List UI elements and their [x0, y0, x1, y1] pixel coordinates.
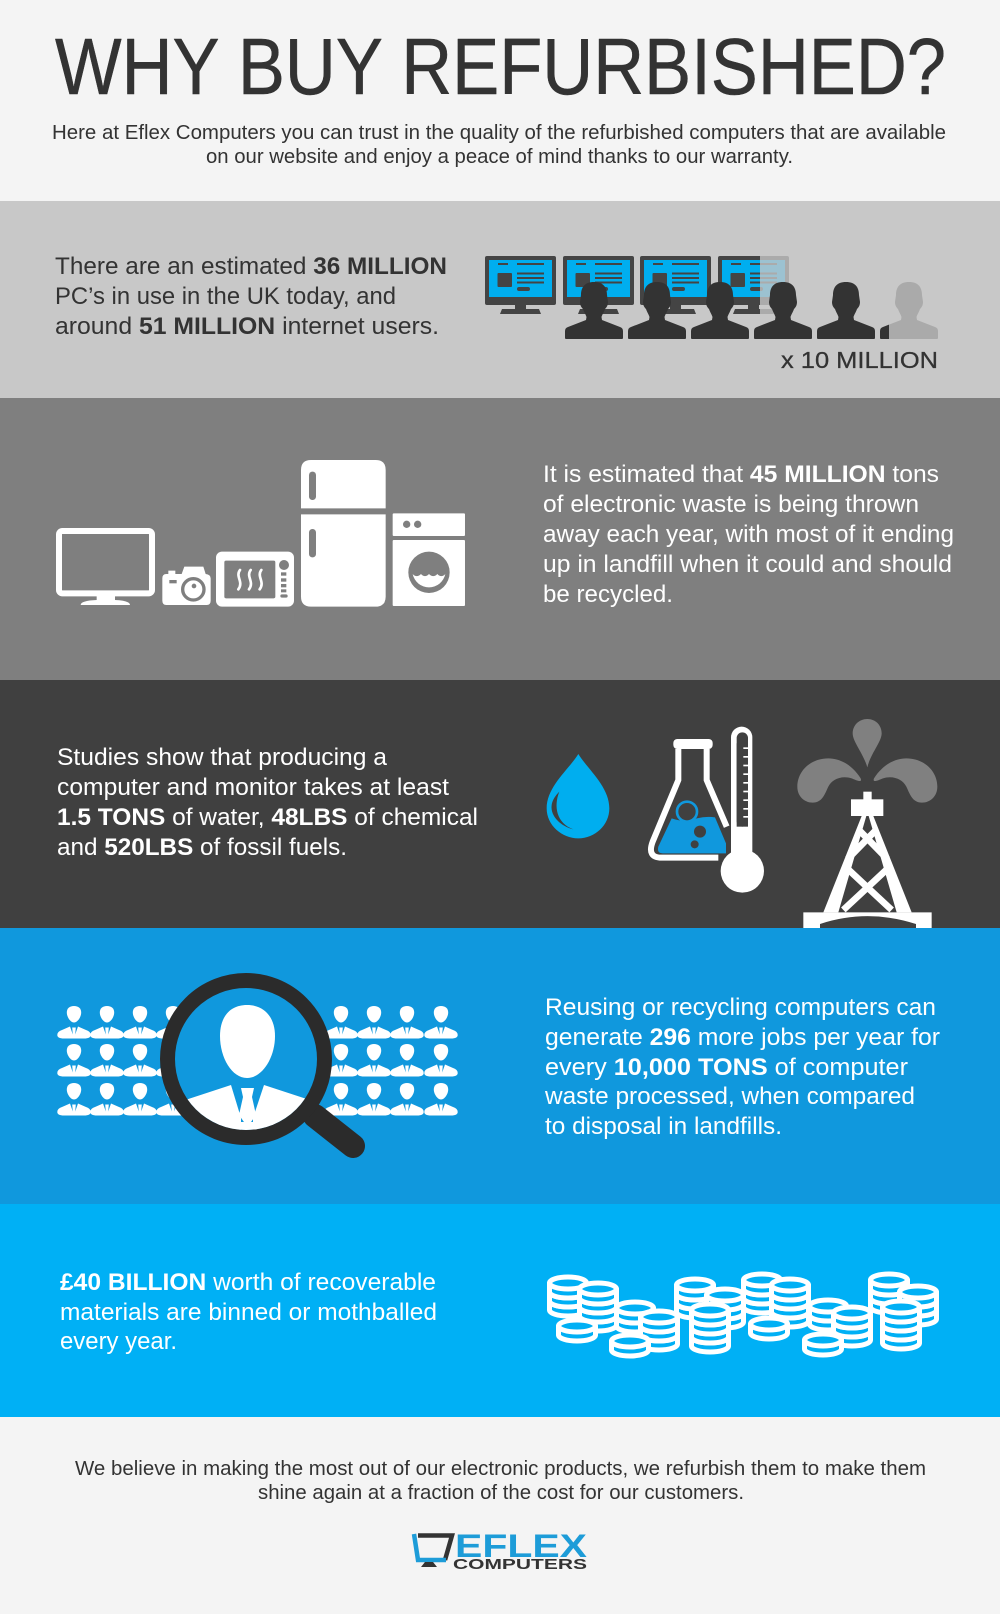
- panel text: recoverable materials: every year.: [60, 1328, 177, 1355]
- panel text: e-waste: away each year, with most of it ending: [543, 521, 954, 548]
- panel text: jobs: [544, 994, 940, 1140]
- panel text: recoverable materials: [60, 1269, 437, 1355]
- panel text: production resources: and 520LBS of fossil fuels.: [57, 834, 347, 861]
- icons: appliances: [59, 460, 465, 607]
- panel: recoverable materials: [0, 1204, 1000, 1417]
- panel text: e-waste: of electronic waste is being thrown: [543, 491, 919, 518]
- panel text: jobs: every 10,000 TONS of computer: [545, 1054, 908, 1081]
- panel text: e-waste: [543, 461, 954, 608]
- panel: electronic waste: [0, 398, 1000, 680]
- panel text: e-waste: It is estimated that 45 MILLION tons: [543, 461, 939, 488]
- panel: PCs and internet users: [0, 201, 1000, 398]
- panel text: jobs: to disposal in landfills.: [545, 1113, 782, 1140]
- closing text: shine again at a fraction of the cost for our customers.: [258, 1482, 744, 1504]
- closing text: [75, 1458, 926, 1504]
- panel: jobs: [0, 928, 1000, 1204]
- icon: microwave: [216, 552, 294, 607]
- panel text: jobs: waste processed, when compared: [544, 1083, 915, 1110]
- panel text: production resources: Studies show that producing a: [57, 744, 388, 771]
- icon: logo monitor: [414, 1534, 452, 1567]
- logo: Eflex Computers: COMPUTERS: [453, 1556, 587, 1573]
- panel text: e-waste: up in landfill when it could and should: [543, 551, 952, 578]
- panel text: PCs in use: around 51 MILLION internet users.: [55, 313, 439, 340]
- logo wordmark: EFLEX: [455, 1528, 588, 1564]
- icon: washing machine: [393, 513, 465, 606]
- icon: flask: [651, 739, 727, 858]
- panel: resources used: [0, 680, 1000, 928]
- icon: camera: [162, 567, 211, 605]
- intro text: on our website and enjoy a peace of mind thanks to our warranty.: [206, 146, 793, 168]
- panel text: production resources: 1.5 TONS of water, 48LBS of chemical: [57, 804, 478, 831]
- panel text: e-waste: be recycled.: [543, 581, 673, 608]
- panel text: jobs: Reusing or recycling computers can: [545, 994, 936, 1021]
- intro text: [52, 122, 946, 168]
- icon: fridge: [301, 460, 386, 607]
- icon: monitors row: [485, 250, 805, 320]
- panel text: recoverable materials: £40 BILLION worth of recoverable: [60, 1269, 436, 1296]
- icon: water drop: [547, 754, 609, 838]
- panel text: production resources: computer and monitor takes at least: [57, 774, 449, 801]
- icon: coin stacks: [550, 1274, 936, 1356]
- icons: crowd of workers: [57, 1006, 458, 1116]
- panel text: PCs in use: There are an estimated 36 MILLION: [55, 253, 447, 280]
- panel text: PCs in use: PC’s in use in the UK today, and: [55, 283, 396, 310]
- panel text: recoverable materials: materials are binned or mothballed: [60, 1299, 437, 1326]
- icon: oil gusher: [797, 719, 937, 803]
- intro text: Here at Eflex Computers you can trust in the quality of the refurbished computers that are available: [52, 122, 946, 144]
- icon: magnifying glass with person: [168, 980, 353, 1146]
- icon: thermometer: [721, 727, 764, 893]
- icon: people row: [565, 282, 938, 339]
- panel text: PCs in use: [55, 253, 447, 340]
- legend: x 10 million: x 10 MILLION: [781, 347, 938, 373]
- closing text: We believe in making the most out of our electronic products, we refurbish them to make them: [75, 1458, 926, 1480]
- panel text: jobs: generate 296 more jobs per year for: [545, 1024, 940, 1051]
- logo: Eflex Computers: [414, 1528, 588, 1573]
- icons: water, chemicals, fossil fuel: [547, 719, 937, 928]
- icon: oil derrick: [803, 792, 932, 928]
- icon: television: [59, 531, 152, 605]
- panel text: production resources: [57, 744, 478, 861]
